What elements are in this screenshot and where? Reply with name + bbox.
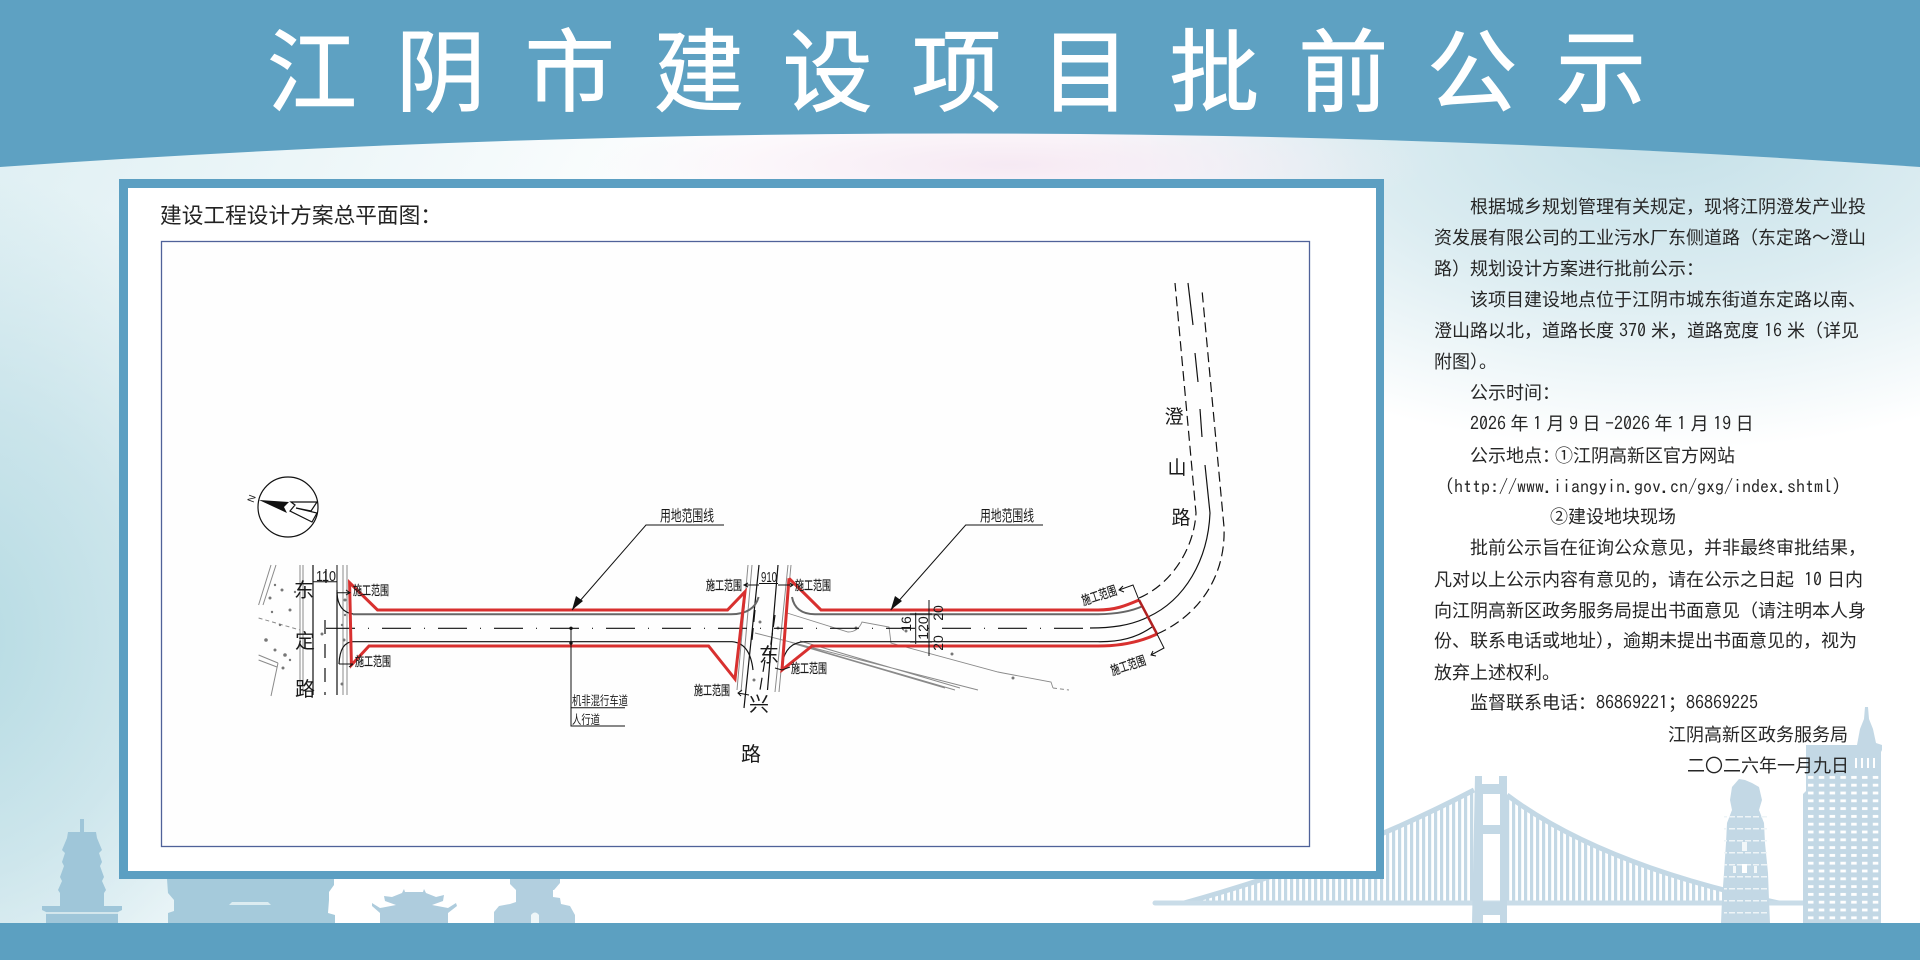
text block: notice: 澄山路以北，道路长度 370 米，道路宽度 16 米（详见 — [1434, 321, 1859, 341]
callout: land boundary left — [572, 507, 724, 610]
labels: construction extent: 施工范围 — [353, 583, 389, 598]
text block: notice: ②建设地块现场 — [1550, 507, 1676, 527]
callout: land boundary right: 用地范围线 — [980, 507, 1034, 525]
icon: north compass — [246, 477, 318, 537]
callout: land boundary left: 用地范围线 — [660, 507, 714, 525]
panel: site plan frame — [119, 179, 1384, 879]
dimension: road cross-section: 20 — [930, 605, 946, 621]
dimension: 9.0: 910 — [761, 569, 777, 586]
text block: notice: 附图）。 — [1434, 352, 1497, 372]
bottom band — [0, 923, 1920, 960]
site context: existing roads and terrain — [259, 565, 1069, 708]
road name: Dongxing Road — [741, 644, 779, 766]
dimension: 11.0 — [313, 565, 337, 590]
skyline: bridge, pagoda and tower — [1152, 707, 1882, 923]
icon: city gate — [494, 879, 575, 923]
road name: Chengshan Road: 山 — [1167, 457, 1187, 479]
road name: Dongxing Road: 兴 — [749, 693, 769, 716]
heading: site plan: 建设工程设计方案总平面图： — [160, 203, 442, 228]
labels: construction extent: 施工范围 — [355, 654, 391, 669]
road edges and centre line — [326, 283, 1224, 670]
labels: construction extent: 施工范围 — [1109, 653, 1148, 678]
text block: notice: 向江阴高新区政务服务局提出书面意见（请注明本人身 — [1434, 600, 1866, 620]
callout: road type labels: 机非混行车道 — [572, 693, 628, 708]
callout: road type labels: 人行道 — [572, 713, 600, 727]
icon: pavilion — [372, 889, 457, 923]
road name: Dongding Road: 东 — [294, 579, 314, 602]
text block: notice: 该项目建设地点位于江阴市城东街道东定路以南、 — [1470, 290, 1866, 310]
text block: notice: 江阴高新区政务服务局 — [1668, 724, 1848, 744]
text block: notice: 路）规划设计方案进行批前公示： — [1434, 259, 1704, 279]
road name: Dongding Road: 定 — [295, 630, 315, 653]
icon: stone pagoda — [1721, 779, 1770, 923]
icon: hall building — [167, 879, 335, 923]
text block: notice: 份、联系电话或地址），逾期未提出书面意见的，视为 — [1434, 631, 1857, 651]
icon: north compass: N — [246, 494, 259, 504]
text block: notice: 凡对以上公示内容有意见的，请在公示之日起 10 日内 — [1434, 570, 1863, 590]
dimension: 11.0: 110 — [316, 568, 336, 585]
road name: Dongxing Road: 路 — [741, 743, 761, 766]
road name: Chengshan Road — [1164, 406, 1191, 529]
road name: Dongding Road: 路 — [295, 678, 315, 701]
text block: notice: 根据城乡规划管理有关规定，现将江阴澄发产业投 — [1470, 197, 1866, 217]
labels: construction extent: 施工范围 — [795, 578, 831, 593]
dimension: road cross-section: 16 — [898, 616, 914, 632]
labels: construction extent: 施工范围 — [791, 661, 827, 676]
road name: Chengshan Road: 路 — [1171, 507, 1191, 529]
icon: pagoda — [42, 819, 122, 923]
text block: notice — [1434, 197, 1866, 776]
text block: notice: 监督联系电话：86869221；86869225 — [1470, 693, 1758, 713]
labels: construction extent: 施工范围 — [694, 683, 730, 698]
text block: notice: 资发展有限公司的工业污水厂东侧道路（东定路～澄山 — [1434, 228, 1866, 248]
dimension: 9.0 — [759, 569, 778, 586]
road name: Dongding Road — [294, 579, 315, 701]
road name: Chengshan Road: 澄 — [1164, 406, 1184, 428]
land boundary: red lines — [350, 578, 1157, 679]
text block: notice: 批前公示旨在征询公众意见，并非最终审批结果， — [1470, 538, 1866, 558]
text block: notice: 公示地点：①江阴高新区官方网站 — [1470, 446, 1735, 466]
text block: notice: 放弃上述权利。 — [1434, 663, 1560, 683]
text block: notice: 2026 年 1 月 9 日 -2026 年 1 月 19 日 — [1470, 414, 1754, 434]
chart: road site plan drawing — [160, 240, 1310, 848]
icon: suspension bridge — [1155, 776, 1806, 923]
text block: notice: 二〇二六年一月九日 — [1687, 756, 1849, 776]
header band — [0, 0, 1920, 167]
icon: high-rise tower — [1803, 707, 1882, 923]
text block: notice: (http://www.iiangyin.gov.cn/gxg/index.shtml) — [1445, 478, 1841, 496]
dimension: road cross-section: 20 — [930, 635, 946, 651]
skyline: left landmarks — [42, 819, 575, 923]
arrows: construction extent markers — [337, 583, 1164, 696]
text block: notice: 公示时间： — [1470, 383, 1560, 403]
dimension: road cross-section: 120 — [915, 616, 931, 640]
dimension: road cross-section — [898, 600, 946, 656]
road name: Dongxing Road: 东 — [759, 644, 779, 667]
labels: construction extent — [353, 578, 1148, 698]
labels: construction extent: 施工范围 — [706, 578, 742, 593]
callout: road type labels — [569, 627, 628, 727]
title: 江阴市建设项目批前公示 — [267, 0, 1685, 130]
labels: construction extent: 施工范围 — [1080, 583, 1119, 608]
callout: land boundary right — [891, 507, 1043, 610]
